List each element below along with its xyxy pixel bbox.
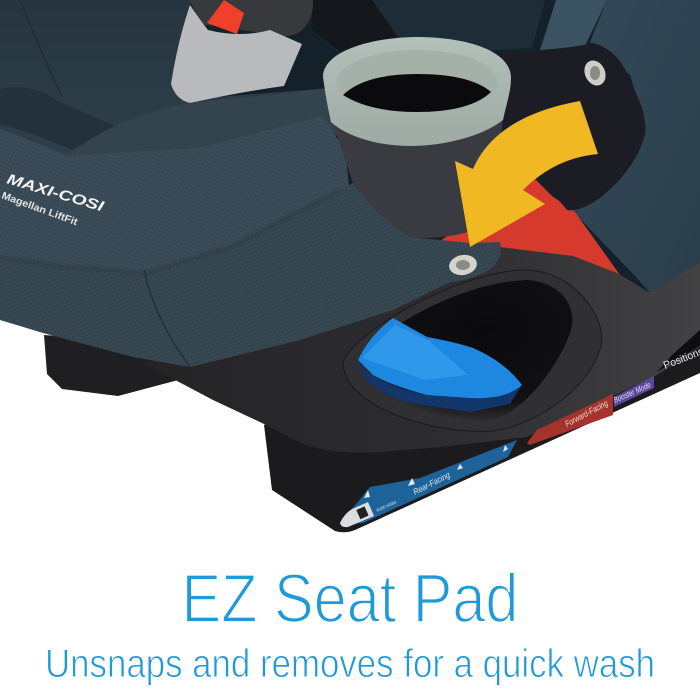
arrow: yellow curved arrow [455, 101, 598, 247]
grey pocket [171, 5, 302, 103]
brand name: MAXI-COSI [5, 171, 107, 216]
panel: buckle pocket [171, 0, 313, 103]
icon: cup holder [323, 37, 511, 238]
panel: mesh seat band [0, 116, 350, 278]
buckle [190, 0, 313, 37]
cup body [331, 116, 503, 238]
forward-facing text: Forward-Facing [563, 398, 610, 429]
barcode [356, 506, 369, 519]
upper seat shadow backdrop [160, 0, 650, 300]
dark webbing strap [312, 0, 400, 56]
snap centre [590, 66, 600, 80]
part code: 4380-5684 [375, 499, 398, 513]
seat pad opening in base [343, 270, 602, 431]
dark blue underside [358, 362, 522, 412]
panel: seat back wing [570, 0, 700, 293]
rear foot of the base [44, 335, 190, 396]
snap outer [447, 253, 479, 277]
opening ring [343, 270, 602, 431]
forward-facing label [527, 394, 613, 445]
position triangles [364, 445, 508, 498]
panel: black removable pad flap [500, 43, 645, 210]
blue latch [358, 318, 522, 398]
icon: lower snap [447, 253, 479, 277]
seat centre crease [20, 0, 62, 97]
base shell [143, 247, 700, 453]
icon: upper snap [580, 57, 610, 89]
rear-facing label [340, 440, 517, 524]
cup inner wall [336, 50, 498, 114]
rear-facing text: Rear-Facing [411, 470, 452, 497]
panel: front seat roll [0, 183, 501, 367]
heading: EZ Seat Pad [182, 560, 518, 637]
booster mode label [614, 376, 654, 407]
labels on base [340, 346, 700, 527]
cup rim [323, 37, 511, 146]
shoulder strap [540, 0, 607, 50]
seam between band and roll [0, 190, 340, 273]
latch highlight [362, 325, 468, 380]
panel: seat cushion top [67, 88, 345, 165]
opening cavity [358, 280, 572, 421]
snap outer [580, 57, 610, 89]
black slot at right of base [657, 330, 700, 372]
red belt-path frame [440, 177, 620, 275]
model name: Magellan LiftFit [0, 190, 80, 228]
brand text [0, 171, 107, 228]
barcode sticker [340, 502, 374, 527]
booster mode text: Booster Mode [612, 380, 653, 405]
harness strap [312, 0, 545, 58]
panel: seat pad upper area [0, 0, 350, 190]
seam on front roll [144, 270, 190, 367]
red buckle tab [207, 0, 244, 34]
cup opening [343, 74, 491, 112]
front foot of the base [264, 300, 700, 532]
left side bolster fold [0, 87, 120, 150]
snap centre [456, 260, 470, 270]
